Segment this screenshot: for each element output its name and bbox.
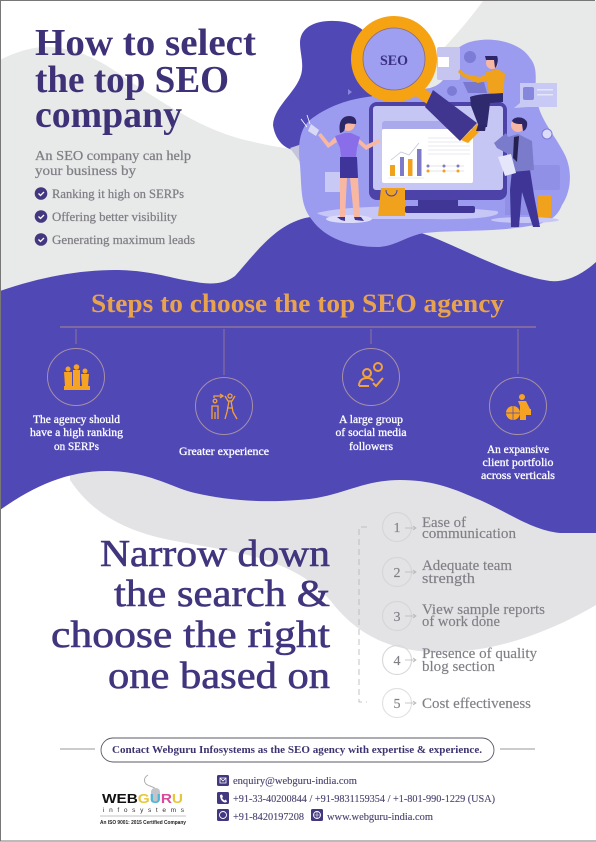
- background: grey lower wave: [70, 440, 596, 652]
- small icons: [464, 51, 476, 63]
- standing man with clipboard: [494, 117, 540, 227]
- step 4: client portfolio: across verticals: [481, 468, 555, 482]
- title: How to select: [35, 22, 256, 64]
- item 3: [382, 602, 545, 630]
- contact callout: Contact Webguru Infosystems as the SEO agency with expertise & experience.: [112, 745, 482, 756]
- intro text: An SEO company can help: [35, 148, 191, 163]
- narrow down heading: the search &: [114, 573, 330, 615]
- narrow down heading: choose the right: [51, 614, 331, 656]
- monitor: [369, 102, 507, 200]
- intro text: your business by: [35, 163, 136, 178]
- item 5: Cost effectiveness: [422, 696, 531, 712]
- shopping bag: [378, 188, 405, 216]
- bullet: leads: Generating maximum leads: [52, 233, 195, 247]
- orange box: [538, 195, 551, 217]
- speech bubble upper: [437, 47, 460, 80]
- website: [311, 809, 433, 823]
- title: company: [35, 94, 182, 136]
- criteria list: [382, 512, 545, 718]
- logo: Webguru: WEB GURU: [102, 791, 183, 806]
- contact details: [217, 775, 495, 823]
- step 4: client portfolio: client portfolio: [482, 455, 554, 469]
- narrow down heading: one based on: [108, 655, 330, 697]
- narrow down heading: Narrow down: [100, 533, 330, 575]
- website: www.webguru-india.com: [327, 812, 433, 823]
- speech bubble right: [514, 83, 557, 108]
- item 5: 5: [394, 697, 400, 712]
- contact callout: [60, 738, 535, 762]
- item 3: 3: [394, 610, 400, 625]
- step 4: client portfolio: [481, 378, 555, 482]
- step 3: social followers: A large group: [339, 412, 403, 426]
- step 1: high ranking: The agency should: [33, 412, 120, 426]
- step 3: social followers: of social media: [336, 425, 407, 439]
- benefits checklist: [35, 187, 195, 247]
- item 4: 4: [394, 654, 400, 669]
- whatsapp: +91-8420197208: [233, 812, 304, 823]
- chart panel: [382, 129, 473, 183]
- background: purple band: [0, 215, 596, 533]
- title: the top SEO: [35, 59, 229, 101]
- logo: Webguru: [100, 775, 187, 826]
- steps connector lines: [60, 327, 536, 375]
- item 2: 2: [394, 566, 400, 581]
- bullet: visibility: Offering better visibility: [52, 210, 178, 224]
- intro text: [35, 148, 191, 178]
- email: enquiry@webguru-india.com: [233, 776, 357, 787]
- item 1: Ease of: [422, 515, 466, 531]
- light blob: [299, 40, 570, 247]
- light wedge: [290, 144, 302, 162]
- item 3: of work done: [422, 614, 500, 630]
- magnifying glass: [357, 22, 483, 143]
- step 1: high ranking: on SERPs: [54, 439, 99, 453]
- dashed bracket: [359, 527, 367, 702]
- step 2: experience: Greater experience: [179, 444, 269, 458]
- item 2: strength: [422, 571, 476, 587]
- icon: group of people: [64, 364, 90, 390]
- icon: two users with check: [359, 363, 383, 386]
- logo: Webguru: infosystems: [103, 807, 185, 814]
- item 4: Presence of quality: [422, 646, 538, 662]
- item 1: communication: [422, 526, 517, 542]
- illustration: SEO team at monitor: [273, 21, 570, 247]
- item 5: [382, 688, 531, 718]
- item 1: [382, 512, 517, 542]
- item 3: View sample reports: [422, 602, 545, 618]
- logo: Webguru: An ISO 9001: 2015 Certified Company: [100, 820, 187, 826]
- step 1: high ranking: have a high ranking: [30, 425, 123, 439]
- woman with megaphone: [301, 115, 381, 221]
- item 1: 1: [394, 521, 400, 536]
- floor: [317, 206, 498, 219]
- item 2: Adequate team: [422, 558, 513, 574]
- dark blob: [273, 21, 375, 150]
- icon: person and growth figure: [212, 394, 237, 419]
- step 2: experience: [179, 378, 269, 458]
- item 4: [382, 646, 538, 675]
- step 3: social followers: followers: [349, 439, 393, 453]
- narrow down heading: [51, 533, 331, 697]
- icon: globe and business person: [506, 394, 531, 420]
- bullet: ranking: Ranking it high on SERPs: [52, 187, 184, 201]
- whatsapp: [217, 809, 304, 823]
- shelves and cart: [325, 172, 340, 192]
- background: grey upper wave: [0, 1, 596, 300]
- step 4: client portfolio: An expansive: [487, 442, 549, 456]
- item 2: [382, 558, 513, 587]
- phone: +91-33-40200844 / +91-9831159354 / +1-801-990-1229 (USA): [233, 794, 495, 805]
- item 4: blog section: [422, 659, 496, 675]
- title: [35, 22, 256, 136]
- seated man with laptop: [458, 56, 505, 131]
- steps heading: Steps to choose the top SEO agency: [91, 289, 504, 318]
- step 3: social followers: [336, 348, 407, 453]
- step 1: high ranking: [30, 348, 123, 453]
- magnifying glass: SEO: [380, 53, 408, 69]
